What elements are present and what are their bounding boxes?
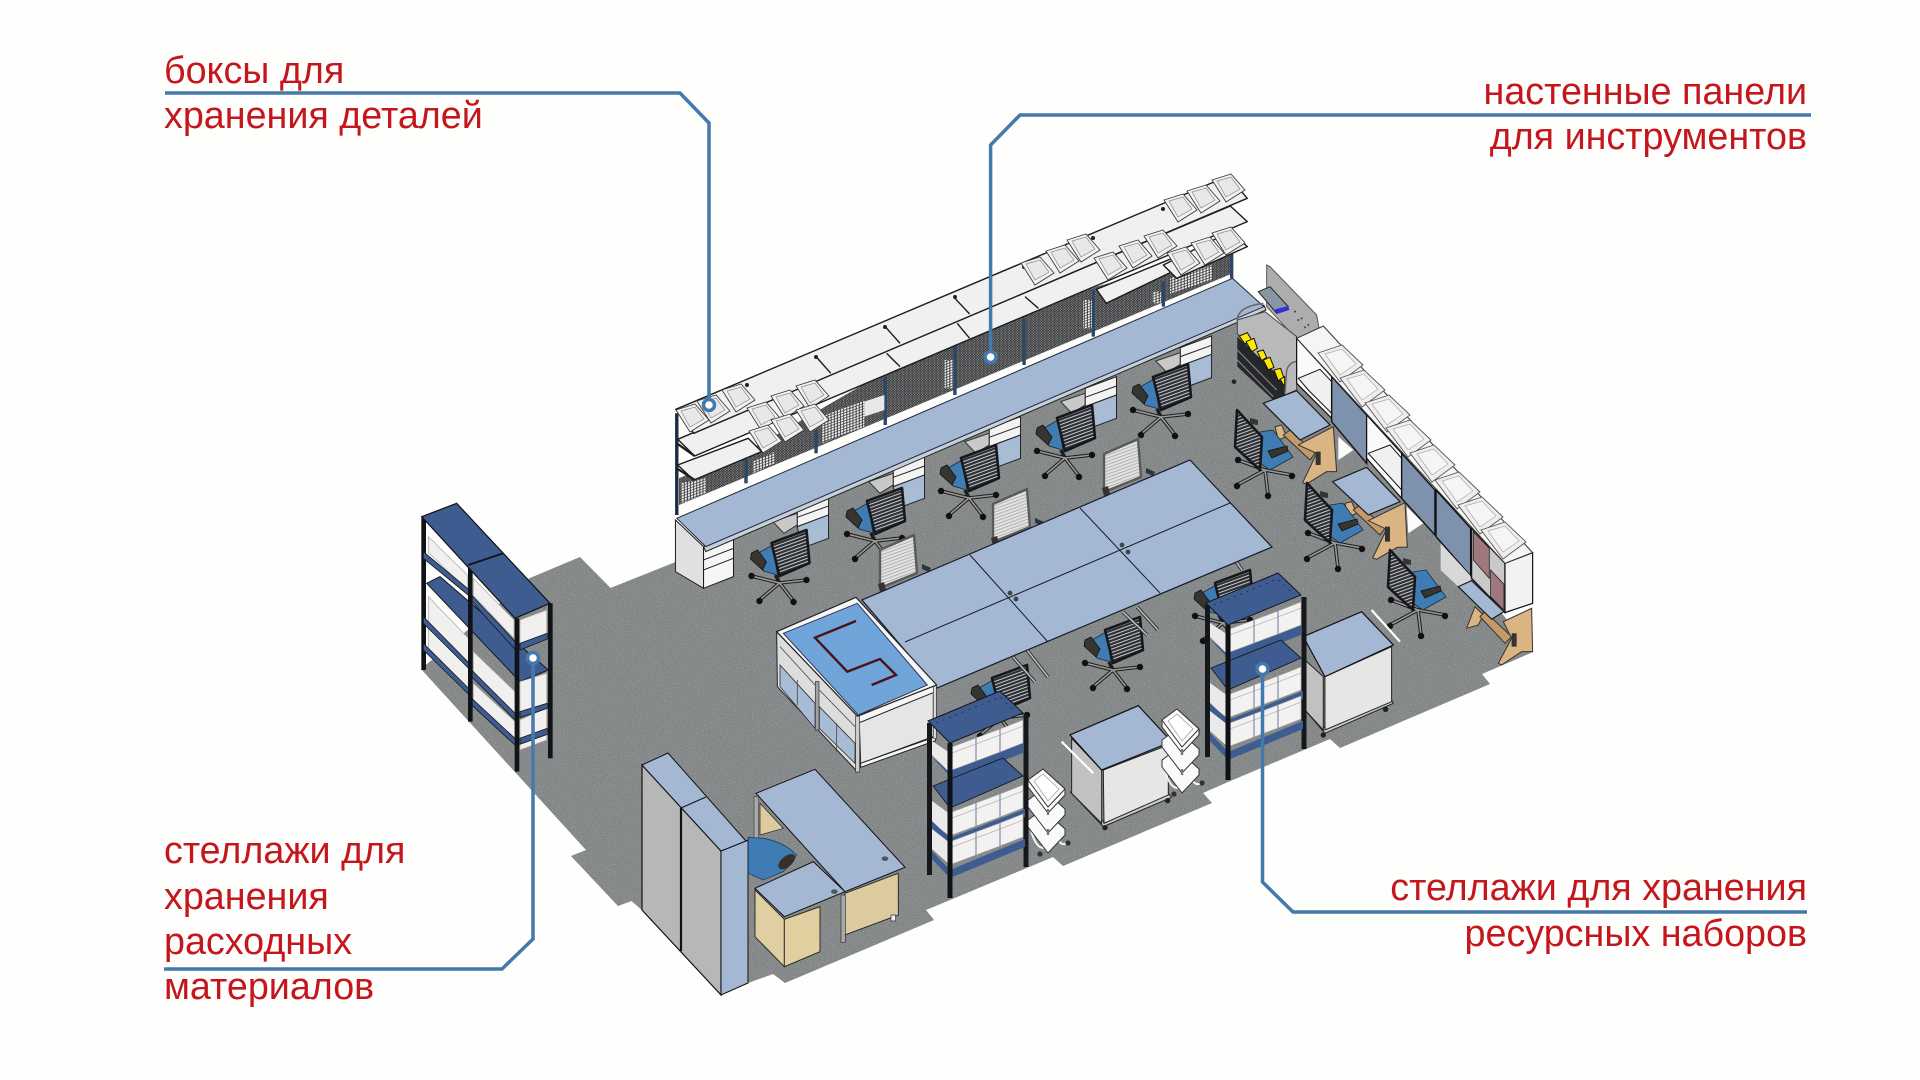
label text: расходных: [164, 920, 352, 962]
callout: wall tool panels: [985, 70, 1811, 362]
white stacking carts: [1028, 709, 1205, 857]
shelf tiers: [676, 176, 1247, 480]
bench chairs: [748, 364, 1191, 605]
callout: resource kit racks: [1257, 664, 1807, 954]
perforated wall panel: [1267, 265, 1319, 339]
shelving racks for resource kits: [927, 573, 1306, 898]
rack shelf strips: [423, 552, 547, 747]
leader line: [165, 93, 709, 404]
small storage boxes on panels: [681, 265, 1212, 503]
isometric workspace illustration: [421, 174, 1533, 995]
tool wall and storage with yellow bins: [1232, 265, 1319, 402]
leader dot: [1257, 664, 1268, 674]
label text: стеллажи для хранения: [1390, 866, 1807, 908]
office desk with chair: [748, 769, 905, 967]
label text: стеллажи для: [164, 829, 405, 871]
blue document tray: [1258, 287, 1288, 313]
parts storage bins on shelves: [676, 174, 1245, 453]
trolley rear: [1303, 610, 1400, 738]
desk 2: [1333, 467, 1407, 559]
central table legs: [1013, 560, 1242, 682]
wall-mounted tool panels with shelves: [676, 176, 1247, 515]
right desk chairs: [1234, 410, 1448, 639]
tall storage cabinet: [642, 753, 748, 995]
shelf bracket knobs: [745, 207, 1165, 387]
label text: для инструментов: [1490, 115, 1807, 157]
layout table with blue top: [777, 597, 937, 772]
panel posts: [677, 250, 1232, 515]
leader line: [991, 115, 1811, 356]
consumables bins: [428, 537, 547, 750]
floor: [421, 278, 1533, 995]
label text: хранения деталей: [164, 94, 483, 136]
right wall cabinets: [1297, 326, 1533, 613]
front posts: [468, 567, 519, 772]
bench top: [704, 305, 1266, 552]
leader line: [164, 658, 533, 969]
desk 1: [1263, 391, 1337, 484]
pegboard panels: [679, 250, 1233, 505]
label text: материалов: [164, 965, 374, 1007]
workbench: [675, 278, 1266, 588]
callout: consumables racks: [164, 652, 538, 1007]
trolley front: [1062, 706, 1172, 830]
leader dot: [704, 400, 714, 410]
label text: настенные панели: [1484, 70, 1807, 112]
central assembly table: [862, 460, 1272, 688]
callout: parts boxes: [164, 49, 714, 410]
label text: ресурсных наборов: [1465, 912, 1807, 954]
desk 3: [1458, 581, 1533, 665]
rolling trolleys: [1062, 610, 1400, 830]
mid shelf: [427, 577, 548, 682]
bench end cabinet: [675, 520, 704, 588]
right wall small desks: [1263, 391, 1533, 665]
label text: боксы для: [164, 49, 344, 91]
chairs partly behind the racks: [969, 570, 1253, 740]
leader dot: [528, 652, 538, 664]
rear posts: [421, 517, 553, 758]
rack top: [422, 503, 550, 618]
leader dot: [985, 352, 996, 362]
leader line: [1262, 670, 1807, 912]
label text: хранения: [164, 875, 329, 917]
grey table chairs: [878, 439, 1155, 592]
bins on right wall shelf: [1318, 345, 1526, 559]
yellow bin rack: [1237, 312, 1297, 395]
drawer units: [773, 336, 1212, 548]
racks for consumables: [421, 503, 553, 772]
